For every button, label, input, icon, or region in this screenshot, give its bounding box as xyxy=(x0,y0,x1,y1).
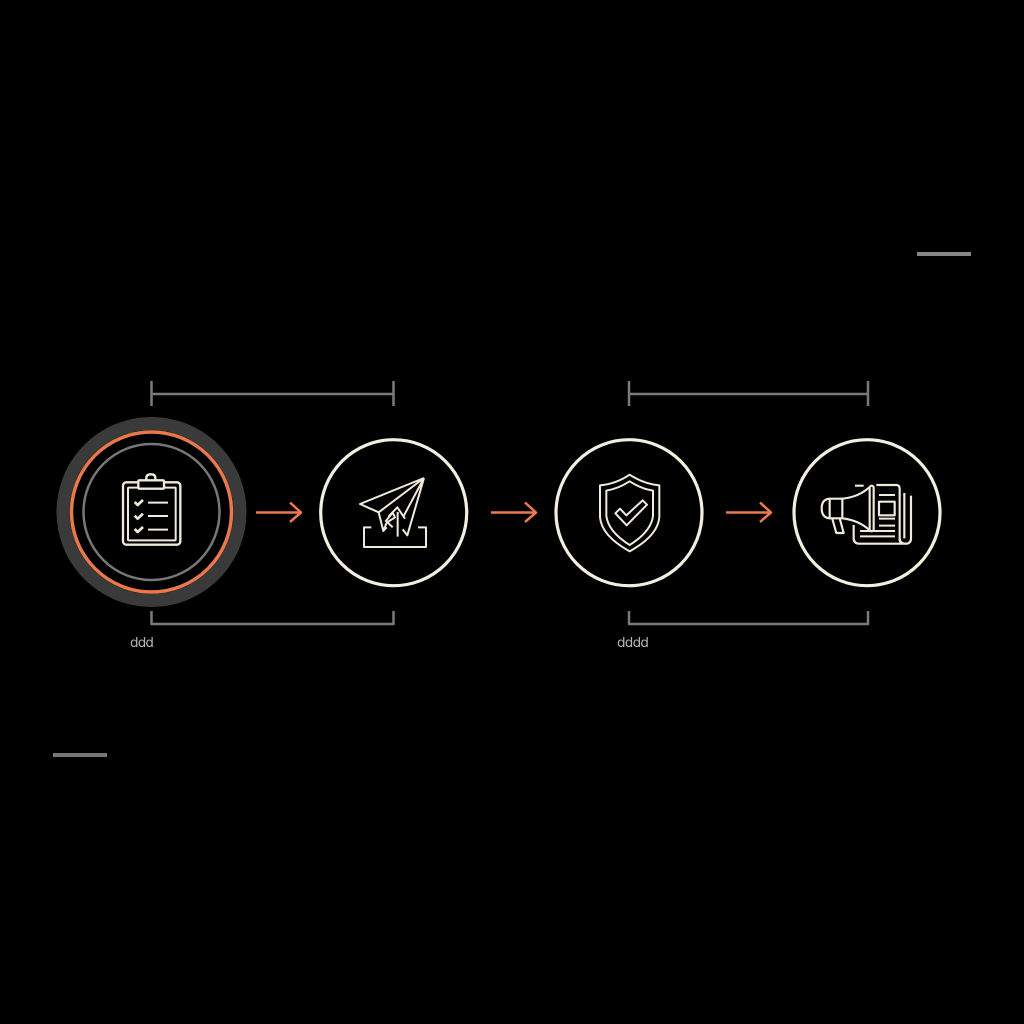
icon: plane and tray xyxy=(360,478,426,547)
bracket: top right group xyxy=(629,381,868,406)
bracket: bottom left group xyxy=(152,611,394,624)
inner grey ring xyxy=(84,444,220,580)
label: dddd: dddd xyxy=(617,635,649,651)
icon: shield with check xyxy=(600,475,659,551)
icon: megaphone and newspaper xyxy=(822,485,911,544)
circle xyxy=(556,440,702,586)
arrow: step 3 to 4 xyxy=(726,502,771,522)
step 1: checklist, highlighted xyxy=(63,424,240,600)
step 2: paper plane upload xyxy=(321,440,467,586)
arrow: step 1 to 2 xyxy=(256,502,301,522)
step 3: shield xyxy=(556,440,702,586)
bracket: top left group xyxy=(152,381,394,406)
dash: top right accent xyxy=(917,252,971,256)
arrow: step 2 to 3 xyxy=(491,502,536,522)
icon: clipboard xyxy=(123,474,180,545)
bracket: bottom right group xyxy=(629,611,868,624)
circle xyxy=(321,440,467,586)
outer halo ring xyxy=(63,424,240,600)
dash: bottom left accent xyxy=(53,753,107,757)
circle xyxy=(794,440,940,586)
orange ring xyxy=(72,432,232,592)
label: ddd: ddd xyxy=(130,635,154,651)
step 4: megaphone and newspaper xyxy=(794,440,940,586)
